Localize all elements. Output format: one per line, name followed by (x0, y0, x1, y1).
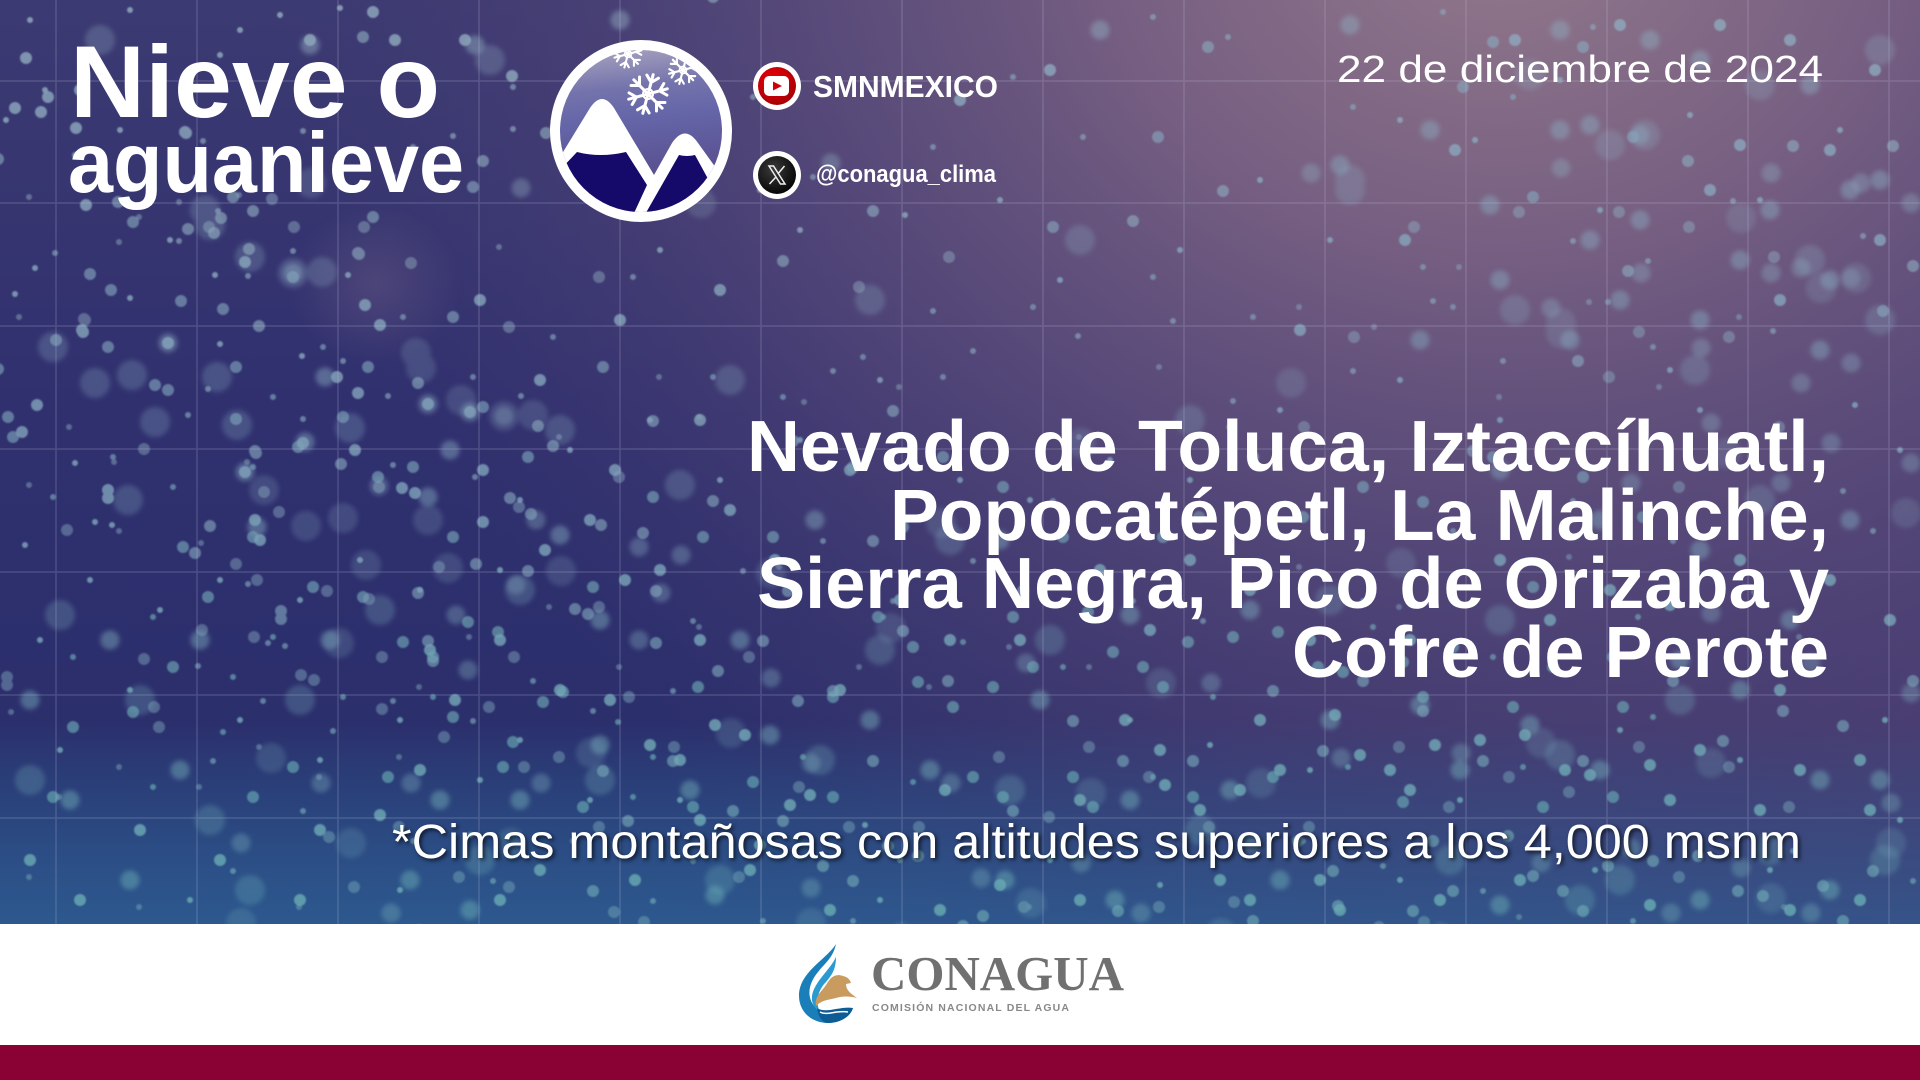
icon: conagua water drop and eagle (799, 944, 857, 1023)
date: 22 de diciembre de 2024 (1337, 49, 1823, 91)
mountain peaks list: Popocatépetl, La Malinche, (890, 476, 1829, 556)
title: aguanieve (68, 116, 464, 211)
icon: youtube (753, 62, 801, 110)
mountain peaks list (747, 407, 1829, 693)
wordmark: CONAGUA (871, 946, 1125, 1001)
mountain peaks list: Sierra Negra, Pico de Orizaba y (757, 544, 1829, 624)
mountain peaks list: Cofre de Perote (1292, 613, 1829, 693)
white footer band (0, 924, 1920, 1045)
altitude footnote: *Cimas montañosas con altitudes superiores a los 4,000 msnm (392, 816, 1801, 869)
mountain peaks list: Nevado de Toluca, Iztaccíhuatl, (747, 407, 1829, 487)
x handle: @conagua_clima (816, 161, 996, 188)
conagua logo (799, 944, 1125, 1023)
icon: snowy mountain logo (550, 40, 732, 222)
maroon footer bar (0, 1045, 1920, 1080)
title: Nieve o (70, 25, 440, 139)
youtube handle: SMNMEXICO (813, 69, 998, 104)
title (68, 25, 464, 211)
tagline: COMISIÓN NACIONAL DEL AGUA (872, 1001, 1069, 1014)
icon: x (753, 151, 801, 199)
